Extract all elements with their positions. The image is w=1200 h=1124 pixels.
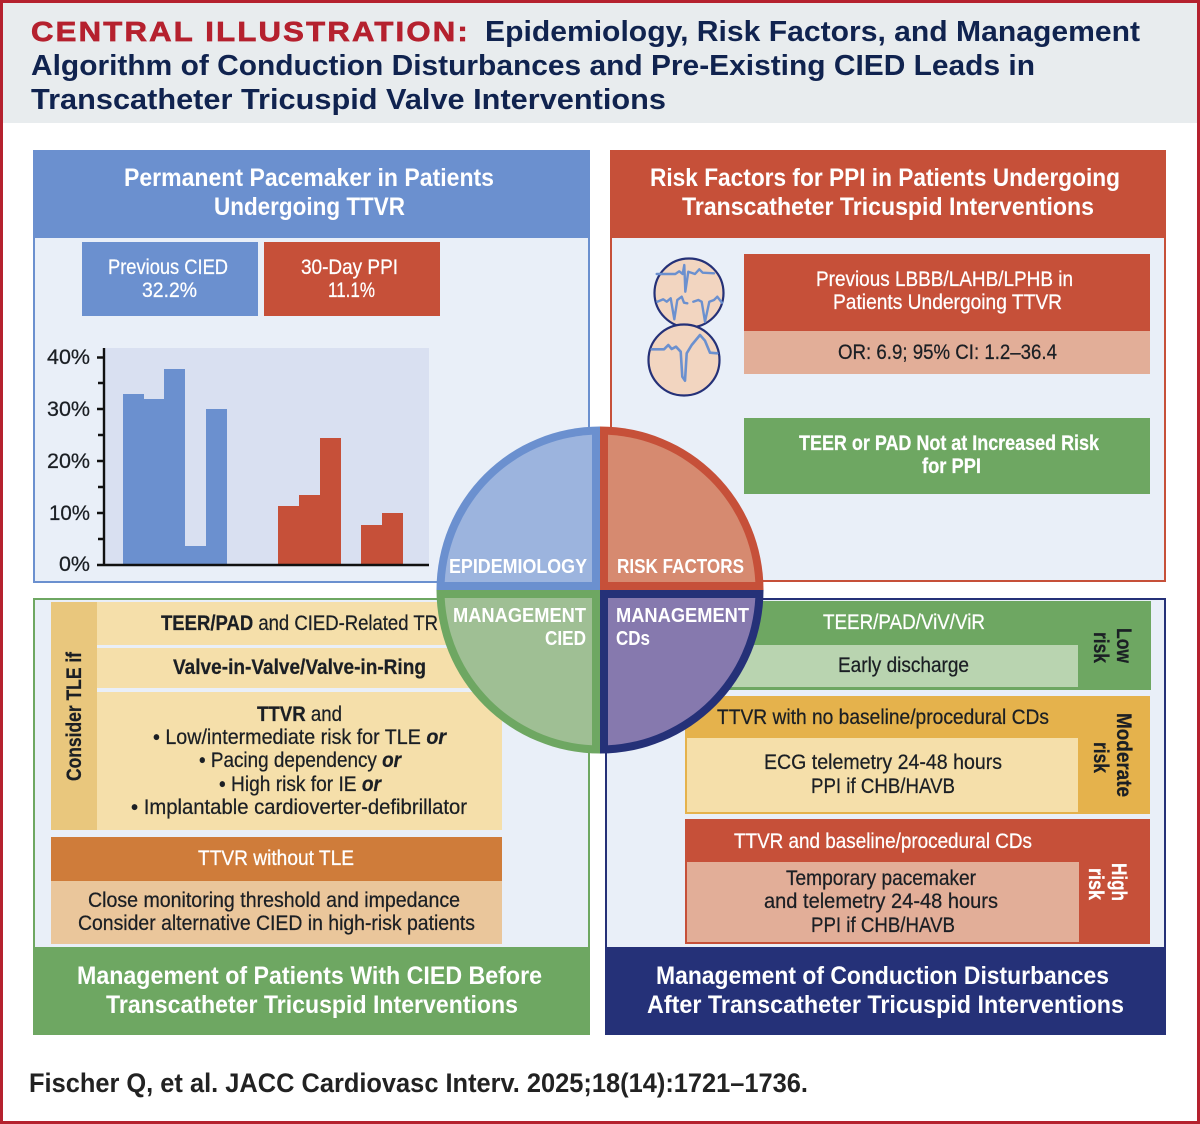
panel: epidemiology [33,150,590,582]
box: TTVR without TLE [51,837,502,881]
blue bars: previous CIED [123,369,227,565]
stat: 30-day PPI [264,242,440,316]
citation: Fischer Q, et al. JACC Cardiovasc Interv. 2025;18(14):1721–1736. [29,1068,808,1098]
quadrant: epidemiology [436,426,600,590]
tier: high risk: PPI if CHB/HAVB [811,914,955,937]
y axis [47,346,429,576]
tier: high risk [685,819,1150,944]
quadrant: epidemiology: EPIDEMIOLOGY [449,556,588,578]
tier: high risk: High [1107,863,1130,901]
tier: low risk: Early discharge [838,654,969,677]
heading: permanent pacemaker [33,150,590,238]
tier: moderate risk [685,696,1150,814]
heading: management of conduction disturbances: Management of Conduction Disturbances [656,962,1109,990]
y axis: 20% [47,450,90,473]
box: close monitoring: Close monitoring threshold and impedance [88,889,460,912]
heading: risk factors for PPI: Risk Factors for PPI in Patients Undergoing [650,164,1120,192]
title banner: Algorithm of Conduction Disturbances and Pre-Existing CIED Leads in [31,50,1035,82]
row: TTVR criteria [97,692,502,830]
stat: 30-day PPI: 30-Day PPI [301,256,398,279]
quadrant: management CIED: CIED [545,628,586,650]
row: valve-in-valve [97,648,502,688]
y axis: 0% [59,553,90,576]
quadrant: management CDs [600,590,764,754]
tier: low risk [685,601,1151,690]
tier: moderate risk: Moderate [1112,713,1135,797]
heading: management of patients with CIED: Management of Patients With CIED Before [77,962,542,990]
row: TTVR criteria: • Low/intermediate risk for TLE or [153,726,448,749]
box: close monitoring: Consider alternative CIED in high-risk patients [78,912,475,935]
quadrant: management CIED: MANAGEMENT [453,605,586,627]
heading: permanent pacemaker: Permanent Pacemaker in Patients [124,164,494,192]
box: TTVR without TLE: TTVR without TLE [198,847,354,870]
row: TEER/PAD [97,602,502,645]
heading: risk factors for PPI: Transcatheter Tricuspid Interventions [682,193,1094,221]
tier: low risk: TEER/PAD/ViV/ViR [823,611,985,634]
quadrant: management CIED [436,590,600,754]
title banner [3,3,1197,123]
tier: low risk: risk [1089,632,1112,663]
box: previous LBBB [744,254,1150,331]
quadrant: management CDs: CDs [616,628,650,650]
y axis: 40% [47,346,90,369]
panel: risk factors [610,150,1166,581]
quadrant: risk factors: RISK FACTORS [617,556,744,578]
row: TTVR criteria: • High risk for IE or [219,773,383,796]
box: odds ratio [744,331,1150,374]
box: previous LBBB: Previous LBBB/LAHB/LPHB in [816,268,1073,291]
heading: risk factors for PPI [610,150,1166,238]
title banner: Epidemiology, Risk Factors, and Management [485,16,1140,48]
tier: low risk: Low [1112,628,1135,664]
y axis: 10% [49,502,90,525]
stat: 30-day PPI: 11.1% [328,279,375,302]
heading: management of conduction disturbances [605,947,1166,1035]
heading: management of conduction disturbances: After Transcatheter Tricuspid Interventions [647,991,1124,1019]
red bars: 30-day PPI [278,438,403,565]
tier: high risk: and telemetry 24-48 hours [764,890,998,913]
box: TEER or PAD [744,418,1150,494]
row: TTVR criteria: TTVR and [257,703,342,726]
tier: high risk: risk [1084,868,1107,900]
tier: high risk: TTVR and baseline/procedural CDs [734,830,1032,853]
tier: moderate risk: TTVR with no baseline/procedural CDs [717,706,1049,729]
heading: management of patients with CIED: Transcatheter Tricuspid Interventions [106,991,518,1019]
box: close monitoring [51,881,502,944]
title banner: Transcatheter Tricuspid Valve Interventions [31,84,666,116]
tier: moderate risk: PPI if CHB/HAVB [811,775,955,798]
stat: previous CIED [82,242,258,316]
y axis: 30% [47,398,90,421]
bar chart [47,346,429,576]
stat: previous CIED: 32.2% [142,279,197,302]
box: previous LBBB: Patients Undergoing TTVR [833,291,1062,314]
central circle [436,426,764,754]
box: odds ratio: OR: 6.9; 95% CI: 1.2–36.4 [838,341,1057,364]
row: valve-in-valve: Valve-in-Valve/Valve-in-Ring [173,656,426,679]
tier: moderate risk: risk [1089,742,1112,773]
panel: management of conduction disturbances [605,599,1166,1035]
box: TEER or PAD: TEER or PAD Not at Increased Risk [799,432,1099,455]
icon: ECG traces in circles [648,258,724,396]
row: TTVR criteria: • Implantable cardioverter-defibrillator [131,796,467,819]
panel: management of CIED [33,599,590,1035]
heading: management of patients with CIED [33,947,590,1035]
column label: consider TLE if [51,602,97,830]
tier: moderate risk: ECG telemetry 24-48 hours [764,751,1002,774]
box: TEER or PAD: for PPI [922,455,981,478]
title banner: CENTRAL ILLUSTRATION: [31,16,470,47]
quadrant: risk factors [600,426,764,590]
stat: previous CIED: Previous CIED [108,256,228,279]
quadrant: management CDs: MANAGEMENT [616,605,749,627]
column label: consider TLE if: Consider TLE if [63,651,86,781]
row: TEER/PAD: TEER/PAD and CIED-Related TR [161,612,438,635]
tier: high risk: Temporary pacemaker [786,867,976,890]
heading: permanent pacemaker: Undergoing TTVR [214,193,405,221]
row: TTVR criteria: • Pacing dependency or [199,749,403,772]
